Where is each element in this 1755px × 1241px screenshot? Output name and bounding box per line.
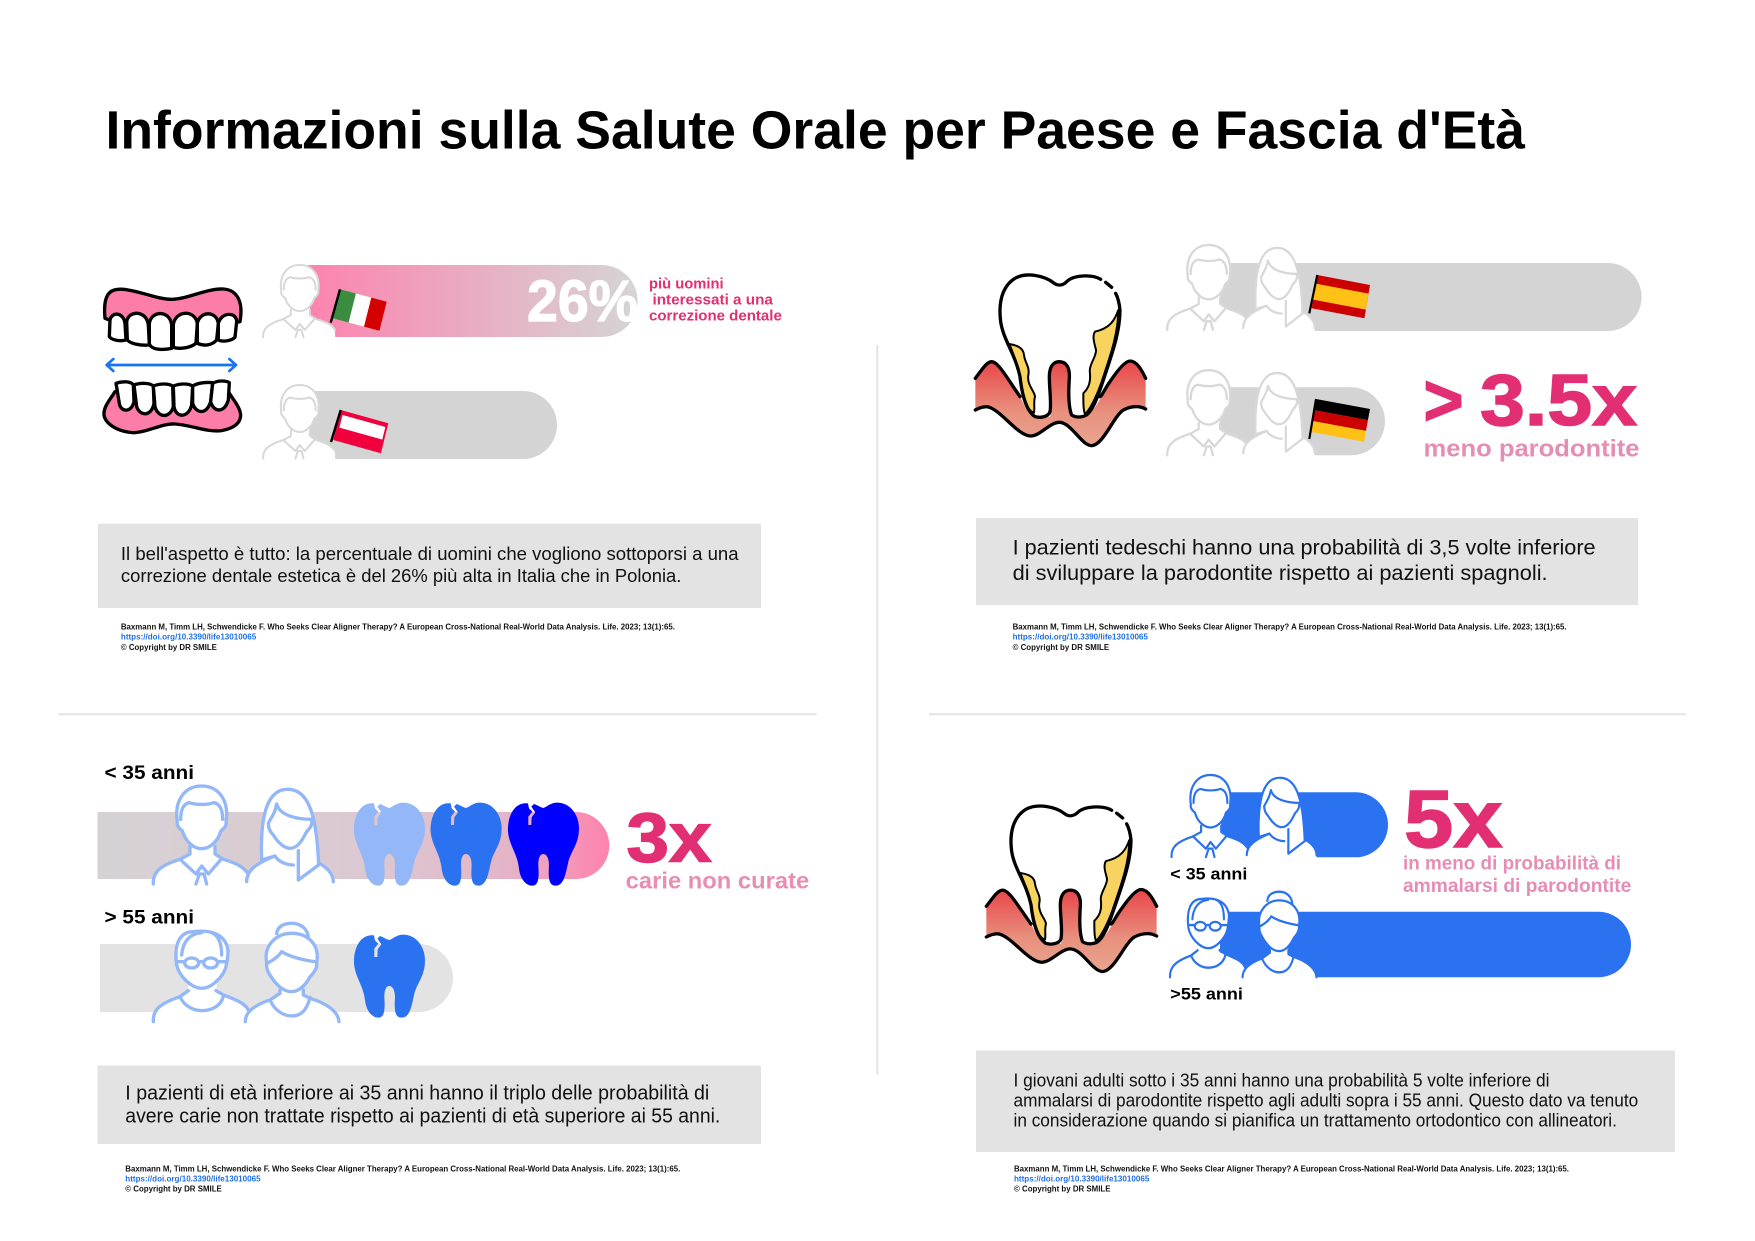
- icons: three decayed teeth: [354, 803, 579, 886]
- callout: più uomini: correzione dentale: [649, 308, 782, 324]
- text block: young adults: I giovani adulti sotto i 35 anni hanno una probabilità 5 volte inferiore di: [1014, 1070, 1550, 1090]
- callout: in meno di probabilità: [1403, 854, 1631, 897]
- label: under 35: < 35 anni: [104, 763, 194, 784]
- citation: Baxmann M, Timm LH, Schwendicke F. Who Seeks Clear Aligner Therapy? A European Cross-National Real-World Data Analysis. Life. 2023; 13(1):65.: [125, 1164, 680, 1174]
- icon: flag Poland: [333, 410, 388, 453]
- bar: over 55: [1218, 912, 1631, 977]
- text block: aesthetics: correzione dentale estetica è del 26% più alta in Italia che in Polonia.: [121, 565, 681, 586]
- icon: couple Spain: [1167, 245, 1315, 337]
- citation: https://doi.org/10.3390/life13010065: [1014, 1174, 1150, 1184]
- text block: young adults: [976, 1050, 1675, 1152]
- panel: Italy vs Poland aesthetic correction: [98, 265, 782, 652]
- bar: Germany: [1218, 387, 1385, 455]
- bar: Poland: [308, 391, 557, 459]
- icon: tooth with periodontitis: [986, 806, 1157, 972]
- citation: © Copyright by DR SMILE: [125, 1184, 222, 1194]
- icon: tooth with periodontitis: [975, 275, 1146, 446]
- text block: Germany: I pazienti tedeschi hanno una probabilità di 3,5 volte inferiore: [1013, 536, 1596, 560]
- title: Informazioni sulla Salute Orale per Paese e Fascia d'Età: [106, 100, 1526, 160]
- icon: flag Germany: [1310, 399, 1370, 442]
- citation: [125, 1164, 680, 1194]
- icon: man Italy: [263, 265, 335, 343]
- stat: 5x: 5x: [1404, 774, 1502, 865]
- stat: 3x: 3x: [626, 798, 712, 876]
- text block: Germany: di sviluppare la parodontite rispetto ai pazienti spagnoli.: [1013, 562, 1548, 585]
- icon: one decayed tooth: [354, 935, 425, 1018]
- label: meno parodontite: meno parodontite: [1424, 436, 1640, 462]
- citation: Baxmann M, Timm LH, Schwendicke F. Who Seeks Clear Aligner Therapy? A European Cross-National Real-World Data Analysis. Life. 2023; 13(1):65.: [1013, 622, 1567, 632]
- icon: elderly couple: [153, 923, 339, 1028]
- icon: young couple: [1171, 775, 1317, 863]
- icon: flag Italy: [333, 289, 387, 331]
- label: carie non curate: carie non curate: [626, 868, 809, 894]
- citation: [1014, 1164, 1569, 1194]
- icon: dentures with blue arrow: [104, 289, 241, 433]
- label: over 55: >55 anni: [1170, 984, 1243, 1004]
- citation: Baxmann M, Timm LH, Schwendicke F. Who Seeks Clear Aligner Therapy? A European Cross-National Real-World Data Analysis. Life. 2023; 13(1):65.: [1014, 1164, 1569, 1174]
- label: over 55: > 55 anni: [104, 908, 194, 928]
- text block: young adults: in considerazione quando si pianifica un trattamento ortodontico con allineatori.: [1014, 1110, 1617, 1130]
- text block: Germany: [976, 518, 1638, 605]
- citation: https://doi.org/10.3390/life13010065: [121, 632, 256, 642]
- icon: couple Germany: [1167, 370, 1315, 462]
- callout: in meno di probabilità: ammalarsi di parodontite: [1403, 876, 1631, 897]
- text block: caries: avere carie non trattate rispetto ai pazienti di età superiore ai 55 anni.: [125, 1104, 720, 1128]
- citation: Baxmann M, Timm LH, Schwendicke F. Who Seeks Clear Aligner Therapy? A European Cross-National Real-World Data Analysis. Life. 2023; 13(1):65.: [121, 622, 675, 632]
- bar: Italy: [308, 265, 638, 337]
- stat: > 3.5x: >: [1424, 361, 1464, 441]
- callout: più uomini: [649, 276, 782, 324]
- callout: più uomini: più uomini: [649, 276, 724, 292]
- panel: Spain vs Germany periodontitis: [975, 245, 1642, 652]
- citation: © Copyright by DR SMILE: [121, 642, 217, 652]
- citation: https://doi.org/10.3390/life13010065: [125, 1174, 261, 1184]
- panel: periodontitis by age: [976, 774, 1675, 1194]
- stat: 26%: 26%: [527, 269, 638, 334]
- stat: > 3.5x: [1424, 361, 1637, 441]
- text block: caries: I pazienti di età inferiore ai 35 anni hanno il triplo delle probabilità di: [125, 1082, 709, 1104]
- citation: [121, 622, 675, 652]
- stat: > 3.5x: 3.5x: [1480, 361, 1637, 441]
- bar: under 35: [98, 812, 609, 879]
- icon: young couple: [153, 786, 333, 892]
- icon: elderly couple: [1170, 892, 1317, 983]
- text block: caries: [98, 1066, 761, 1144]
- icon: flag Spain: [1312, 275, 1370, 318]
- text block: aesthetics: [98, 524, 761, 608]
- panel: caries by age: [98, 763, 809, 1194]
- citation: © Copyright by DR SMILE: [1014, 1184, 1111, 1194]
- citation: [1013, 622, 1567, 652]
- label: under 35: < 35 anni: [1170, 864, 1247, 884]
- callout: in meno di probabilità: in meno di probabilità di: [1403, 854, 1621, 874]
- bar: over 55: [100, 944, 453, 1012]
- text block: young adults: ammalarsi di parodontite rispetto agli adulti sopra i 55 anni. Questo dato va tenuto: [1014, 1090, 1638, 1110]
- icon: man Poland: [263, 385, 335, 464]
- text block: aesthetics: Il bell'aspetto è tutto: la percentuale di uomini che vogliono sottoporsi a una: [121, 543, 739, 564]
- citation: https://doi.org/10.3390/life13010065: [1013, 632, 1148, 642]
- bar: Spain: [1218, 263, 1642, 331]
- citation: © Copyright by DR SMILE: [1013, 642, 1109, 652]
- callout: più uomini: interessati a una: [652, 292, 774, 308]
- bar: under 35: [1218, 792, 1388, 857]
